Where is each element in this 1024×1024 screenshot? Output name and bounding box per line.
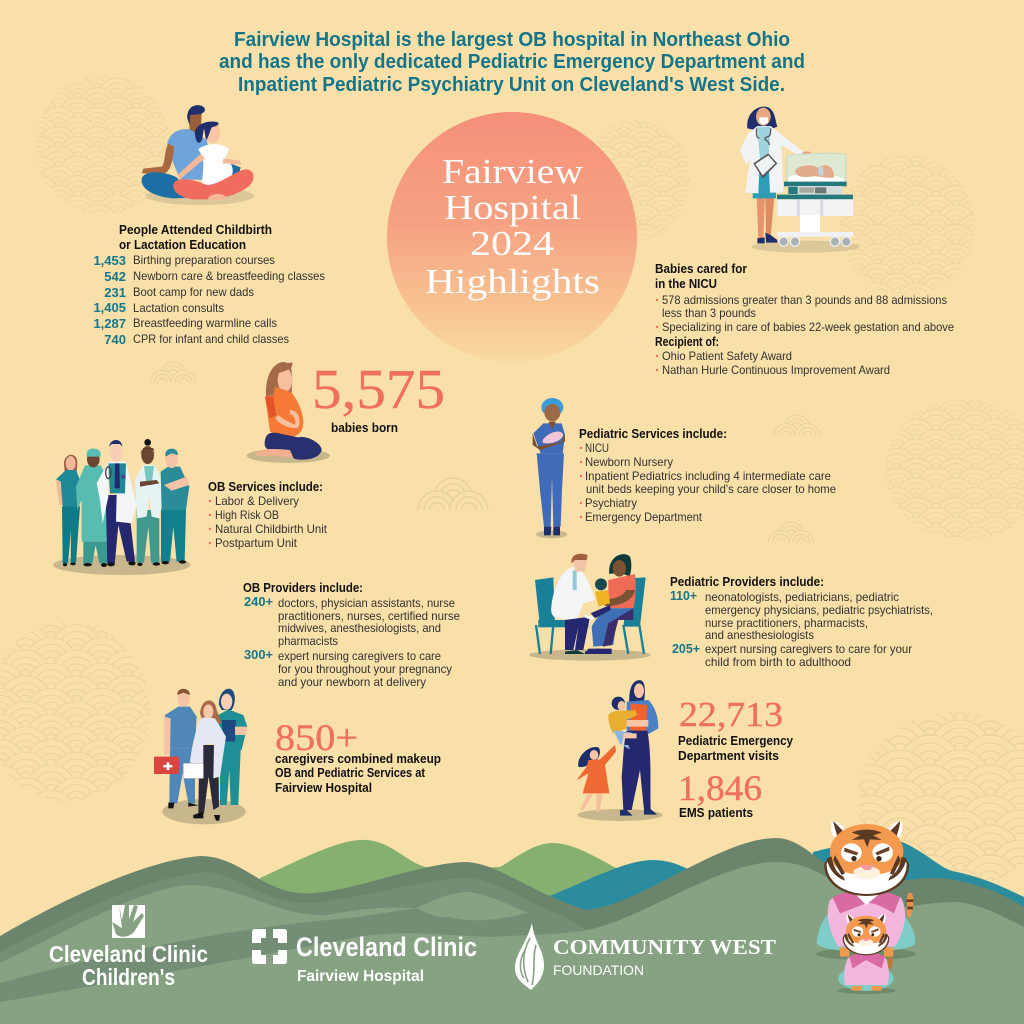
text block: childbirth education: Lactation consults xyxy=(133,301,224,315)
text block: pediatric services: NICU xyxy=(585,441,609,455)
text block: childbirth education: 231 xyxy=(104,285,126,300)
stat: babies born: 5,575 xyxy=(312,359,445,421)
text block: OB providers: pharmacists xyxy=(278,634,338,648)
text block: childbirth education: People Attended Childbirth xyxy=(119,222,272,237)
stats: emergency visits and EMS: 1,846 xyxy=(678,768,762,808)
text block: OB services xyxy=(208,479,328,550)
text block: NICU: in the NICU xyxy=(655,276,717,291)
logo: Cleveland Clinic Children's xyxy=(49,905,208,990)
text block: childbirth education: 1,405 xyxy=(93,300,126,315)
highlights circle: Highlights xyxy=(425,262,600,301)
highlights circle: Hospital xyxy=(444,188,581,227)
logo: Community West Foundation xyxy=(515,923,776,990)
stats: emergency visits and EMS: Pediatric Emergency xyxy=(678,733,794,748)
text block: childbirth education: Birthing preparation courses xyxy=(133,253,275,267)
text block: OB services: Natural Childbirth Unit xyxy=(215,522,328,536)
text block: childbirth education: CPR for infant and child classes xyxy=(133,332,289,346)
icon: tiger mascots xyxy=(816,821,916,994)
text block: pediatric providers: 110+ xyxy=(670,588,697,603)
highlights circle: 2024 xyxy=(470,224,554,263)
text block: NICU: less than 3 pounds xyxy=(662,306,756,320)
text block: NICU: Babies cared for xyxy=(655,261,747,276)
text block: OB providers: and your newborn at delivery xyxy=(278,675,426,689)
text block: pediatric providers: neonatologists, pediatricians, pediatric xyxy=(705,590,899,604)
background scallop patterns xyxy=(0,75,1024,888)
logo: Cleveland Clinic Children's: Cleveland Clinic xyxy=(49,941,208,967)
stat: 850+ caregivers xyxy=(275,718,441,795)
logo: Cleveland Clinic Children's: Children's xyxy=(82,964,175,990)
text block: childbirth education: 1,287 xyxy=(93,316,126,331)
stats: emergency visits and EMS: Department visits xyxy=(678,748,779,763)
text block: NICU: 578 admissions greater than 3 pounds and 88 admissions xyxy=(662,293,947,307)
stats: emergency visits and EMS: 22,713 xyxy=(679,695,783,734)
text block: childbirth education: 1,453 xyxy=(93,253,126,268)
stat: babies born: babies born xyxy=(331,420,398,435)
text block: pediatric providers: Pediatric Providers include: xyxy=(670,574,824,589)
stat: 850+ caregivers: OB and Pediatric Services at xyxy=(275,765,426,780)
title: Fairview Hospital is the largest OB hospital in Northeast Ohio xyxy=(234,29,790,51)
icon: pregnant woman xyxy=(247,362,330,463)
text block: pediatric services: Inpatient Pediatrics including 4 intermediate care xyxy=(585,469,831,483)
text block: OB providers: for you throughout your pregnancy xyxy=(278,662,452,676)
highlights circle xyxy=(387,112,637,362)
icon: mother with children xyxy=(577,680,663,821)
stats: emergency visits and EMS: EMS patients xyxy=(679,805,753,820)
icon: doctor examining child with mother xyxy=(529,554,651,661)
text block: OB providers: practitioners, nurses, certified nurse xyxy=(278,609,460,623)
text block: pediatric services: Pediatric Services include: xyxy=(579,426,727,441)
text block: pediatric services xyxy=(579,426,836,524)
text block: NICU xyxy=(655,261,954,377)
text block: OB providers: OB Providers include: xyxy=(243,580,363,595)
text block: pediatric services: Psychiatry xyxy=(585,496,637,510)
text block: OB services: OB Services include: xyxy=(208,479,323,494)
text block: pediatric providers: and anesthesiologists xyxy=(705,628,814,642)
text block: OB providers xyxy=(243,580,460,689)
stat: 850+ caregivers: Fairview Hospital xyxy=(275,780,372,795)
highlights circle: Fairview xyxy=(442,152,584,191)
icon: caregiver trio xyxy=(154,689,247,824)
title: and has the only dedicated Pediatric Emergency Department and xyxy=(219,51,805,73)
text block: OB services: Postpartum Unit xyxy=(215,536,298,550)
text block: OB providers: 300+ xyxy=(244,647,273,662)
text block: childbirth education: or Lactation Education xyxy=(119,237,246,252)
text block: pediatric providers: 205+ xyxy=(672,641,700,656)
text block: childbirth education: Breastfeeding warmline calls xyxy=(133,316,277,330)
text block: childbirth education: 542 xyxy=(104,269,126,284)
stat: 850+ caregivers: caregivers combined makeup xyxy=(275,751,441,766)
text block: pediatric providers: nurse practitioners, pharmacists, xyxy=(705,616,868,630)
text block: NICU: Nathan Hurle Continuous Improvement Award xyxy=(662,363,890,377)
logo: Community West Foundation: COMMUNITY WEST xyxy=(553,935,776,959)
text block: OB services: High Risk OB xyxy=(215,508,279,522)
logo: Cleveland Clinic Fairview Hospital xyxy=(252,929,477,985)
text block: OB providers: 240+ xyxy=(244,594,273,609)
text block: pediatric services: Newborn Nursery xyxy=(585,455,673,469)
text block: NICU: Specializing in care of babies 22-week gestation and above xyxy=(662,320,954,334)
icon: OB care team xyxy=(53,439,190,575)
text block: NICU: Ohio Patient Safety Award xyxy=(662,349,792,363)
text block: NICU: Recipient of: xyxy=(655,334,719,349)
logo: Cleveland Clinic Fairview Hospital: Cleveland Clinic xyxy=(296,932,477,962)
text block: childbirth education: Boot camp for new dads xyxy=(133,285,254,299)
text block: OB providers: doctors, physician assistants, nurse xyxy=(278,596,455,610)
title xyxy=(219,29,805,96)
logo: Community West Foundation: FOUNDATION xyxy=(553,962,644,978)
text block: pediatric providers: emergency physicians, pediatric psychiatrists, xyxy=(705,603,933,617)
text block: childbirth education: 740 xyxy=(104,332,126,347)
text block: pediatric services: Emergency Department xyxy=(585,510,703,524)
footer landscape xyxy=(0,838,1024,1024)
text block: OB providers: midwives, anesthesiologists, and xyxy=(278,621,441,635)
stats: emergency visits and EMS xyxy=(678,695,794,820)
text block: pediatric providers: expert nursing caregivers to care for your xyxy=(705,642,912,656)
text block: pediatric providers: child from birth to adulthood xyxy=(705,655,851,669)
icon: expecting couple xyxy=(142,105,254,205)
text block: childbirth education xyxy=(93,222,325,347)
logo: Cleveland Clinic Fairview Hospital: Fairview Hospital xyxy=(297,968,424,985)
text block: pediatric services: unit beds keeping your child's care closer to home xyxy=(586,482,836,496)
text block: pediatric providers xyxy=(670,574,933,669)
title: Inpatient Pediatric Psychiatry Unit on Cleveland's West Side. xyxy=(238,74,785,96)
icon: doctor with incubator xyxy=(740,107,860,253)
text block: OB providers: expert nursing caregivers to care xyxy=(278,649,441,663)
stat: 850+ caregivers: 850+ xyxy=(275,718,358,759)
text block: childbirth education: Newborn care & breastfeeding classes xyxy=(133,269,325,283)
icon: nurse holding baby xyxy=(533,398,567,538)
text block: OB services: Labor & Delivery xyxy=(215,494,299,508)
